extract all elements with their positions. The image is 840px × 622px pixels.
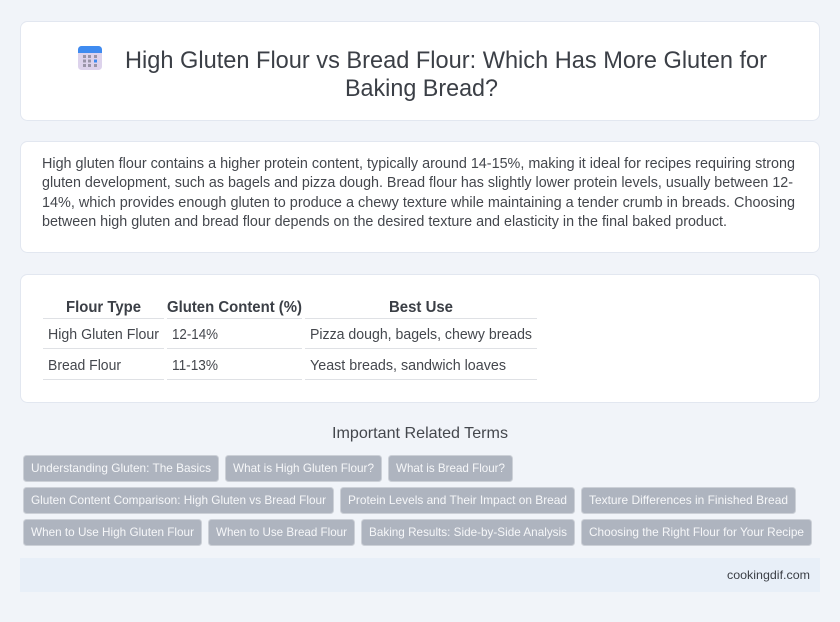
- table row: high gluten flour: [48, 327, 532, 343]
- related terms tags: Gluten Content Comparison: High Gluten vs Bread Flour: [31, 493, 326, 507]
- text block: summary: gluten development, such as bagels and pizza dough. Bread flour has slightly lower protein levels, usually between 12-: [42, 175, 793, 191]
- panel: comparison table: [20, 274, 820, 402]
- icon: calendar: [78, 46, 102, 70]
- table row: bread flour: Bread Flour: [48, 358, 121, 374]
- title: [125, 47, 767, 102]
- table header: Gluten Content (%): [167, 299, 302, 316]
- title: Baking Bread?: [345, 75, 498, 102]
- related terms tags: Texture Differences in Finished Bread: [589, 493, 788, 507]
- footer: [20, 558, 820, 592]
- table header: Flour Type: [66, 299, 141, 316]
- related terms tags: What is High Gluten Flour?: [233, 461, 374, 475]
- related terms tags: Understanding Gluten: The Basics: [31, 461, 211, 475]
- related terms tags: Protein Levels and Their Impact on Bread: [348, 493, 567, 507]
- table row: high gluten flour: 12-14%: [172, 327, 218, 343]
- text block: summary: High gluten flour contains a higher protein content, typically around 14-15%, making it ideal for recipes requiring strong: [42, 156, 795, 172]
- related terms tags: Baking Results: Side-by-Side Analysis: [369, 525, 567, 539]
- related terms tags: When to Use High Gluten Flour: [31, 525, 194, 539]
- table row: high gluten flour: Pizza dough, bagels, chewy breads: [310, 327, 532, 343]
- title: High Gluten Flour vs Bread Flour: Which Has More Gluten for: [125, 47, 767, 74]
- table row: bread flour: 11-13%: [172, 358, 218, 374]
- related terms tags: Choosing the Right Flour for Your Recipe: [589, 525, 804, 539]
- panel: summary paragraph: [20, 142, 820, 252]
- text block: summary: [42, 156, 795, 230]
- related terms tags: When to Use Bread Flour: [216, 525, 347, 539]
- related terms tags: [24, 456, 812, 546]
- panel: header: [20, 22, 820, 120]
- heading: related terms: Important Related Terms: [332, 425, 508, 442]
- text block: summary: between high gluten and bread flour depends on the desired texture and elasticity in the final baked product.: [42, 214, 727, 230]
- table row: bread flour: Yeast breads, sandwich loaves: [310, 358, 506, 374]
- footer credit: cookingdif.com: [727, 568, 810, 582]
- table header: Best Use: [389, 299, 453, 316]
- related terms tags: What is Bread Flour?: [396, 461, 505, 475]
- table row: high gluten flour: High Gluten Flour: [48, 327, 159, 343]
- text block: summary: 14%, which provides enough gluten to produce a chewy texture while maintaining a tender crumb in breads. Choosing: [42, 195, 795, 211]
- table row: bread flour: [48, 358, 506, 374]
- table header: [66, 299, 453, 316]
